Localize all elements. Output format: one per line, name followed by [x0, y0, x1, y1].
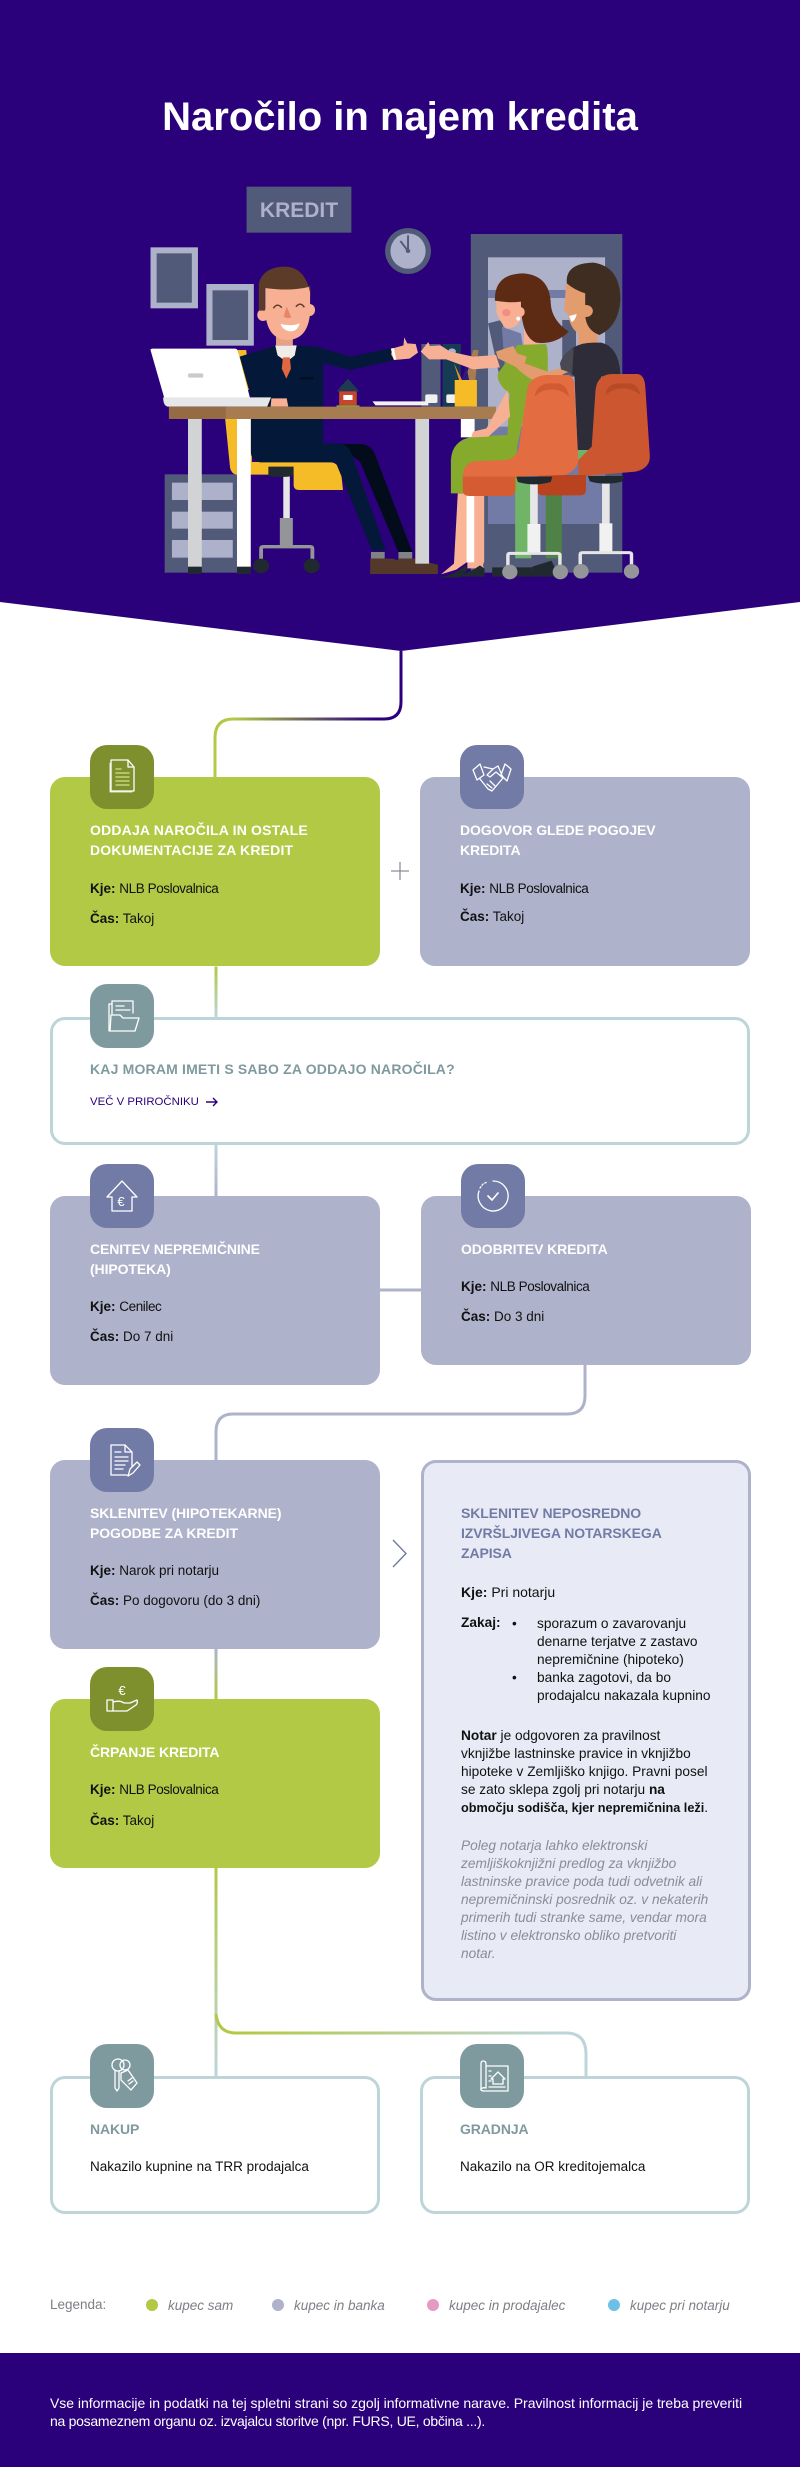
panel: kaj moram imeti s sabo	[50, 984, 750, 1145]
panel: notarski zapis	[421, 1460, 751, 2001]
title: Naročilo in najem kredita	[162, 95, 638, 139]
notary paragraph: vknjižbe lastninske pravice in vknjižbo	[461, 1746, 691, 1761]
panel: oddaja naročila	[50, 745, 380, 966]
reason list: denarne terjatve z zastavo	[537, 1634, 698, 1649]
icon: house with euro	[90, 1164, 154, 1228]
icon: handshake	[460, 745, 524, 809]
italic note: primerih tudi stranke same, vendar mora	[461, 1910, 707, 1925]
reason list: •	[512, 1670, 517, 1685]
reason list: •	[512, 1616, 517, 1631]
where: Kje: NLB Poslovalnica	[460, 881, 588, 896]
icon: contract and pen	[90, 1428, 154, 1492]
heading: (HIPOTEKA)	[90, 1261, 171, 1277]
panel: dogovor glede pogojev	[420, 745, 750, 966]
where: Kje: Cenilec	[90, 1299, 161, 1314]
notary paragraph: Notar je odgovoren za pravilnost	[461, 1728, 660, 1743]
heading: ZAPISA	[461, 1545, 512, 1561]
italic note	[460, 1838, 708, 1961]
panel: črpanje kredita	[50, 1667, 380, 1868]
where: Kje: NLB Poslovalnica	[461, 1279, 589, 1294]
time: Čas: Po dogovoru (do 3 dni)	[90, 1593, 260, 1608]
picture frames	[151, 247, 254, 346]
man customer	[492, 263, 620, 577]
italic note: lastninske pravice poda tudi odvetnik ali	[461, 1874, 702, 1889]
heading: SKLENITEV NEPOSREDNO	[461, 1505, 641, 1521]
legend: kupec sam	[168, 2298, 233, 2313]
italic note: Poleg notarja lahko elektronski	[461, 1838, 647, 1853]
heading: IZVRŠLJIVEGA NOTARSKEGA	[461, 1525, 662, 1541]
heading	[90, 1505, 281, 1541]
legend: kupec in banka	[294, 2298, 385, 2313]
reason list: banka zagotovi, da bo	[537, 1670, 671, 1685]
yellow chair	[225, 350, 343, 490]
italic note: listino v elektronsko obliko pretvoriti	[461, 1928, 676, 1943]
heading	[460, 822, 656, 858]
arrow: chevron	[392, 1540, 407, 1568]
where: Kje: Pri notarju	[461, 1584, 555, 1600]
heading: ČRPANJE KREDITA	[90, 1744, 219, 1760]
panel: gradnja	[420, 2044, 750, 2214]
front chair	[463, 375, 578, 579]
notary paragraph: hipoteke v Zemljiško knjigo. Pravni posel	[461, 1764, 708, 1779]
reason list: sporazum o zavarovanju	[537, 1616, 686, 1631]
italic note: nepremičninski posrednik oz. v nekaterih	[461, 1892, 708, 1907]
woman	[421, 273, 569, 577]
where: Kje: NLB Poslovalnica	[90, 1782, 218, 1797]
reason list: Zakaj:	[461, 1615, 501, 1630]
footer disclaimer: na posameznem organu oz. izvajalcu storitve (npr. FURS, UE, občina ...).	[50, 2413, 485, 2429]
wall clock	[385, 228, 431, 274]
sign text: KREDIT	[260, 199, 338, 222]
shelf with binders	[471, 234, 622, 573]
heading	[461, 1505, 662, 1561]
filing cabinet	[165, 474, 238, 573]
back chair	[537, 374, 650, 579]
panel: cenitev nepremičnine	[50, 1164, 380, 1385]
sign: kredit	[247, 187, 351, 233]
heading: DOGOVOR GLEDE POGOJEV	[460, 822, 656, 838]
notary paragraph: območju sodišča, kjer nepremičnina leži.	[461, 1800, 708, 1815]
icon: hand with euro	[90, 1667, 154, 1731]
icon: folder	[90, 984, 154, 1048]
icon: building plan	[460, 2044, 524, 2108]
text: Nakazilo kupnine na TRR prodajalca	[90, 2159, 309, 2174]
reason list: prodajalcu nakazala kupnino	[537, 1688, 710, 1703]
icon: hand with euro: €	[118, 1683, 126, 1698]
panel: nakup	[50, 2044, 380, 2214]
heading: CENITEV NEPREMIČNINE	[90, 1241, 260, 1257]
heading: KREDITA	[460, 842, 520, 858]
laptop	[151, 349, 271, 407]
legend: kupec in prodajalec	[449, 2298, 565, 2313]
where: Kje: Narok pri notarju	[90, 1563, 219, 1578]
documents on desk	[372, 401, 428, 405]
time: Čas: Takoj	[90, 1813, 154, 1828]
notary paragraph: se zato sklepa zgolj pri notarju na	[461, 1782, 665, 1797]
heading: NAKUP	[90, 2121, 139, 2137]
icon: document	[90, 745, 154, 809]
italic note: zemljiškoknjižni predlog za vknjižbo	[461, 1856, 676, 1871]
italic note: notar.	[461, 1946, 496, 1961]
model house	[336, 379, 359, 407]
legend: Legenda:	[50, 2297, 106, 2312]
header banner	[0, 0, 800, 651]
heading: ODOBRITEV KREDITA	[461, 1241, 608, 1257]
notary paragraph	[461, 1728, 708, 1815]
legend: kupec pri notarju	[630, 2298, 730, 2313]
icon: house with euro: €	[117, 1194, 125, 1209]
icon: approval check	[461, 1164, 525, 1228]
desk	[169, 407, 496, 574]
link with arrow: VEČ V PRIROČNIKU	[90, 1096, 199, 1108]
heading: GRADNJA	[460, 2121, 529, 2137]
heading: SKLENITEV (HIPOTEKARNE)	[90, 1505, 281, 1521]
time: Čas: Do 3 dni	[461, 1309, 544, 1324]
plus sign	[391, 862, 409, 880]
time: Čas: Takoj	[90, 911, 154, 926]
desk items	[421, 344, 478, 407]
heading: KAJ MORAM IMETI S SABO ZA ODDAJO NAROČILA?	[90, 1061, 455, 1077]
reason list: nepremičnine (hipoteko)	[537, 1652, 684, 1667]
heading	[90, 822, 308, 858]
legend	[50, 2297, 730, 2313]
advisor	[240, 267, 438, 574]
footer disclaimer: Vse informacije in podatki na tej spletni strani so zgolj informativne narave. Pravilnost informacij je treba preveriti	[50, 2395, 742, 2411]
heading: ODDAJA NAROČILA IN OSTALE	[90, 822, 308, 838]
heading: DOKUMENTACIJE ZA KREDIT	[90, 842, 293, 858]
heading	[90, 1241, 260, 1277]
text: Nakazilo na OR kreditojemalca	[460, 2159, 645, 2174]
icon: keys with tag	[90, 2044, 154, 2108]
illustration: bank advisor with couple at a desk	[150, 186, 650, 580]
where: Kje: NLB Poslovalnica	[90, 881, 218, 896]
heading: POGODBE ZA KREDIT	[90, 1525, 238, 1541]
panel: sklenitev pogodbe	[50, 1428, 380, 1649]
time: Čas: Takoj	[460, 909, 524, 924]
reason list	[461, 1615, 710, 1703]
panel: odobritev kredita	[421, 1164, 751, 1365]
footer disclaimer	[0, 2353, 800, 2467]
time: Čas: Do 7 dni	[90, 1329, 173, 1344]
customer arm on woman's back	[496, 346, 574, 383]
chair base	[253, 467, 320, 573]
